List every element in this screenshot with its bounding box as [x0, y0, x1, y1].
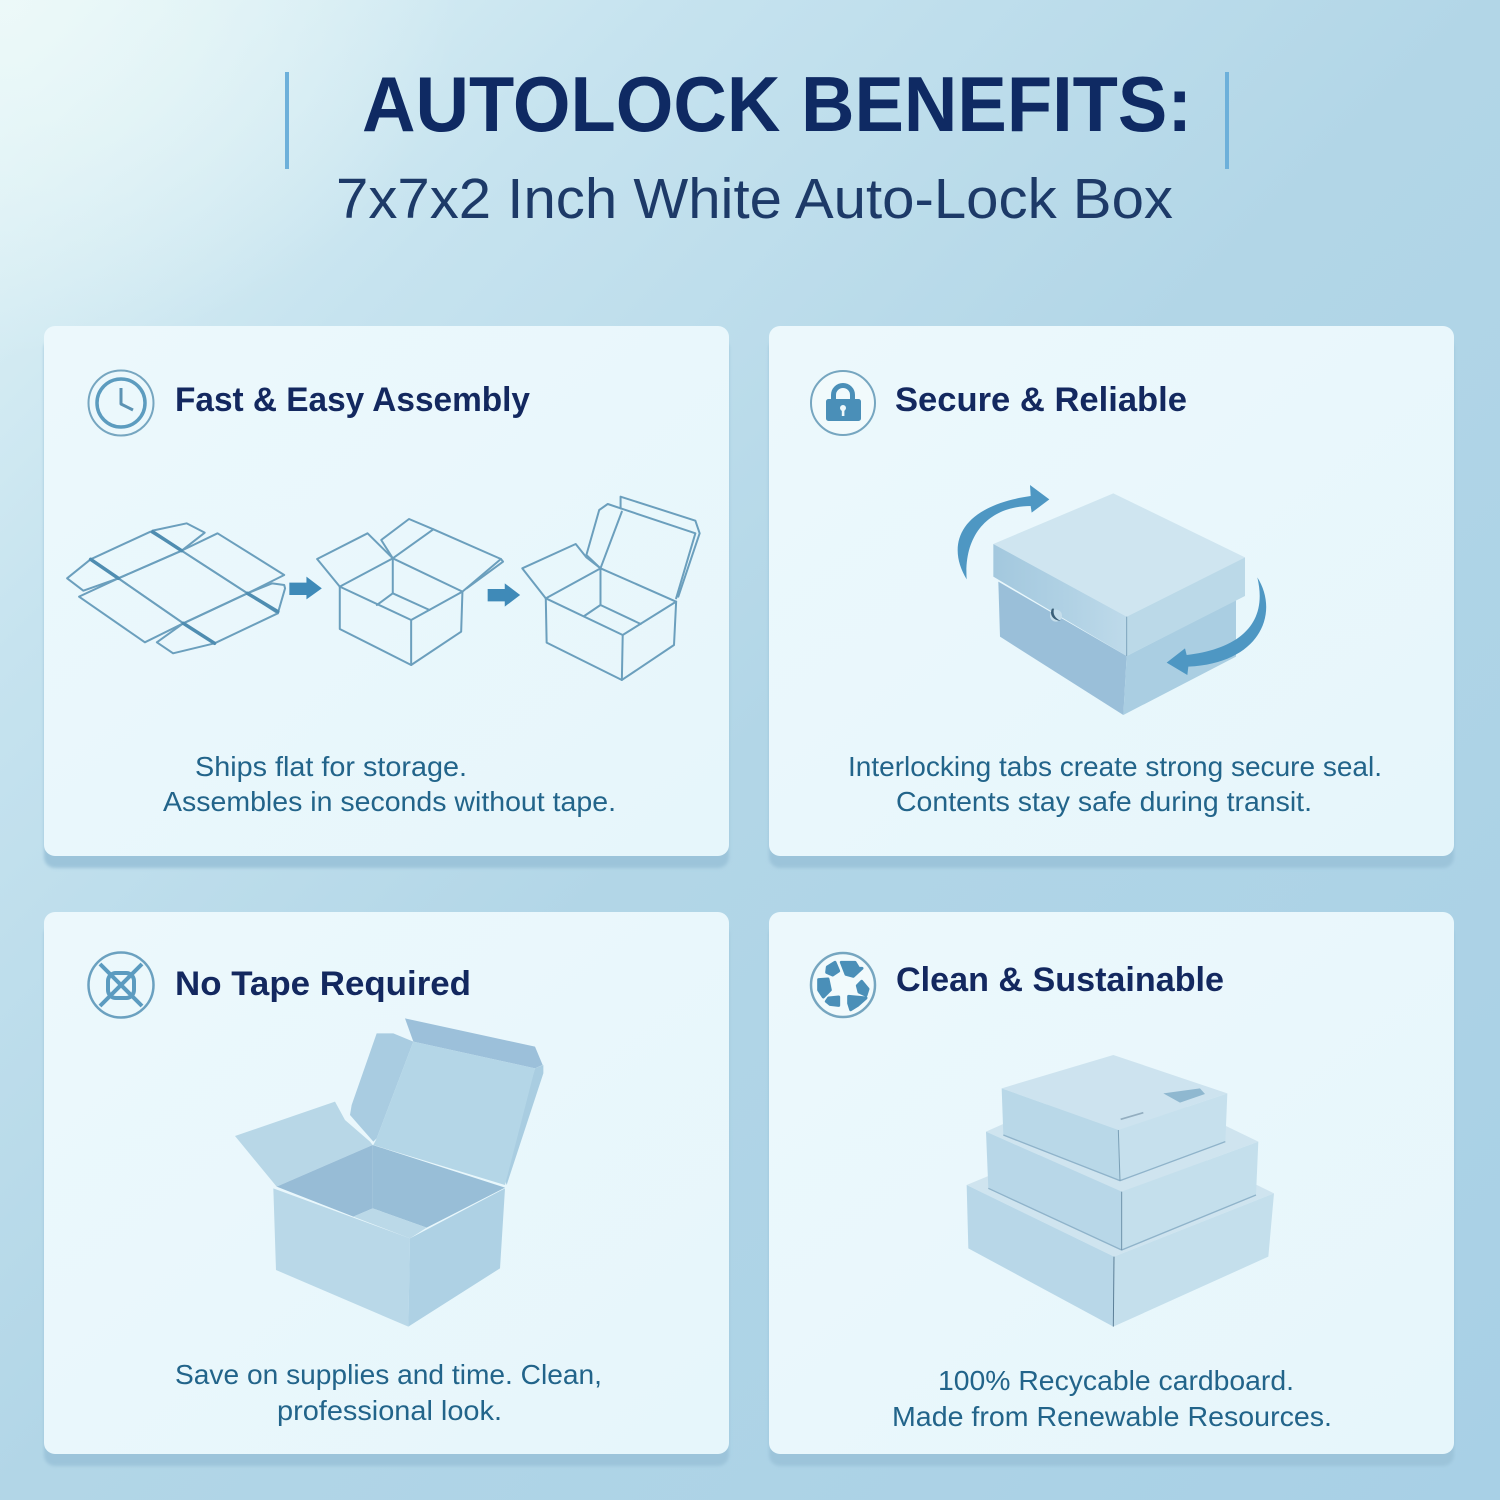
title block — [285, 60, 1229, 231]
arrow — [289, 577, 322, 599]
caption: Assembles in seconds without tape. — [163, 786, 616, 817]
illustration: open box — [235, 1018, 543, 1327]
heading: No Tape Required — [175, 965, 471, 1003]
half-open box outline — [317, 519, 503, 665]
heading: Fast & Easy Assembly — [175, 381, 530, 419]
panel: No Tape Required — [44, 912, 729, 1466]
illustration: closed box with rotation arrows — [958, 485, 1266, 715]
caption: Ships flat for storage. — [195, 751, 467, 782]
panel: Secure & Reliable — [769, 326, 1454, 868]
caption: 100% Recycable cardboard. — [938, 1365, 1294, 1396]
subtitle: 7x7x2 Inch White Auto-Lock Box — [336, 167, 1173, 231]
heading: Clean & Sustainable — [896, 961, 1224, 999]
icon: no tape — [88, 952, 154, 1018]
box — [993, 493, 1245, 715]
panel: Clean & Sustainable — [769, 912, 1454, 1466]
caption — [175, 1359, 602, 1426]
caption: Contents stay safe during transit. — [896, 786, 1312, 817]
open box outline — [522, 497, 700, 680]
caption: professional look. — [277, 1395, 502, 1426]
icon: recycle — [811, 953, 875, 1017]
panel: Fast & Easy Assembly — [44, 326, 729, 868]
flat box net — [67, 523, 285, 653]
right title bar — [1225, 72, 1229, 169]
caption — [892, 1365, 1332, 1432]
illustration: stacked boxes — [967, 1055, 1274, 1327]
icon: clock — [88, 370, 154, 436]
left title bar — [285, 72, 289, 169]
top box — [1002, 1055, 1227, 1181]
caption: Interlocking tabs create strong secure seal. — [848, 751, 1382, 782]
title: AUTOLOCK BENEFITS: — [362, 60, 1192, 148]
rotation arrow bottom — [1167, 577, 1266, 675]
caption: Save on supplies and time. Clean, — [175, 1359, 602, 1390]
icon: padlock — [811, 371, 875, 435]
bottom box — [967, 1120, 1274, 1327]
heading: Secure & Reliable — [895, 381, 1187, 419]
middle box — [986, 1073, 1258, 1250]
assembly line drawing — [67, 497, 700, 680]
caption — [163, 751, 616, 817]
rotation arrow top — [958, 485, 1049, 579]
arrow — [488, 583, 520, 607]
caption: Made from Renewable Resources. — [892, 1401, 1332, 1432]
caption — [848, 751, 1382, 817]
